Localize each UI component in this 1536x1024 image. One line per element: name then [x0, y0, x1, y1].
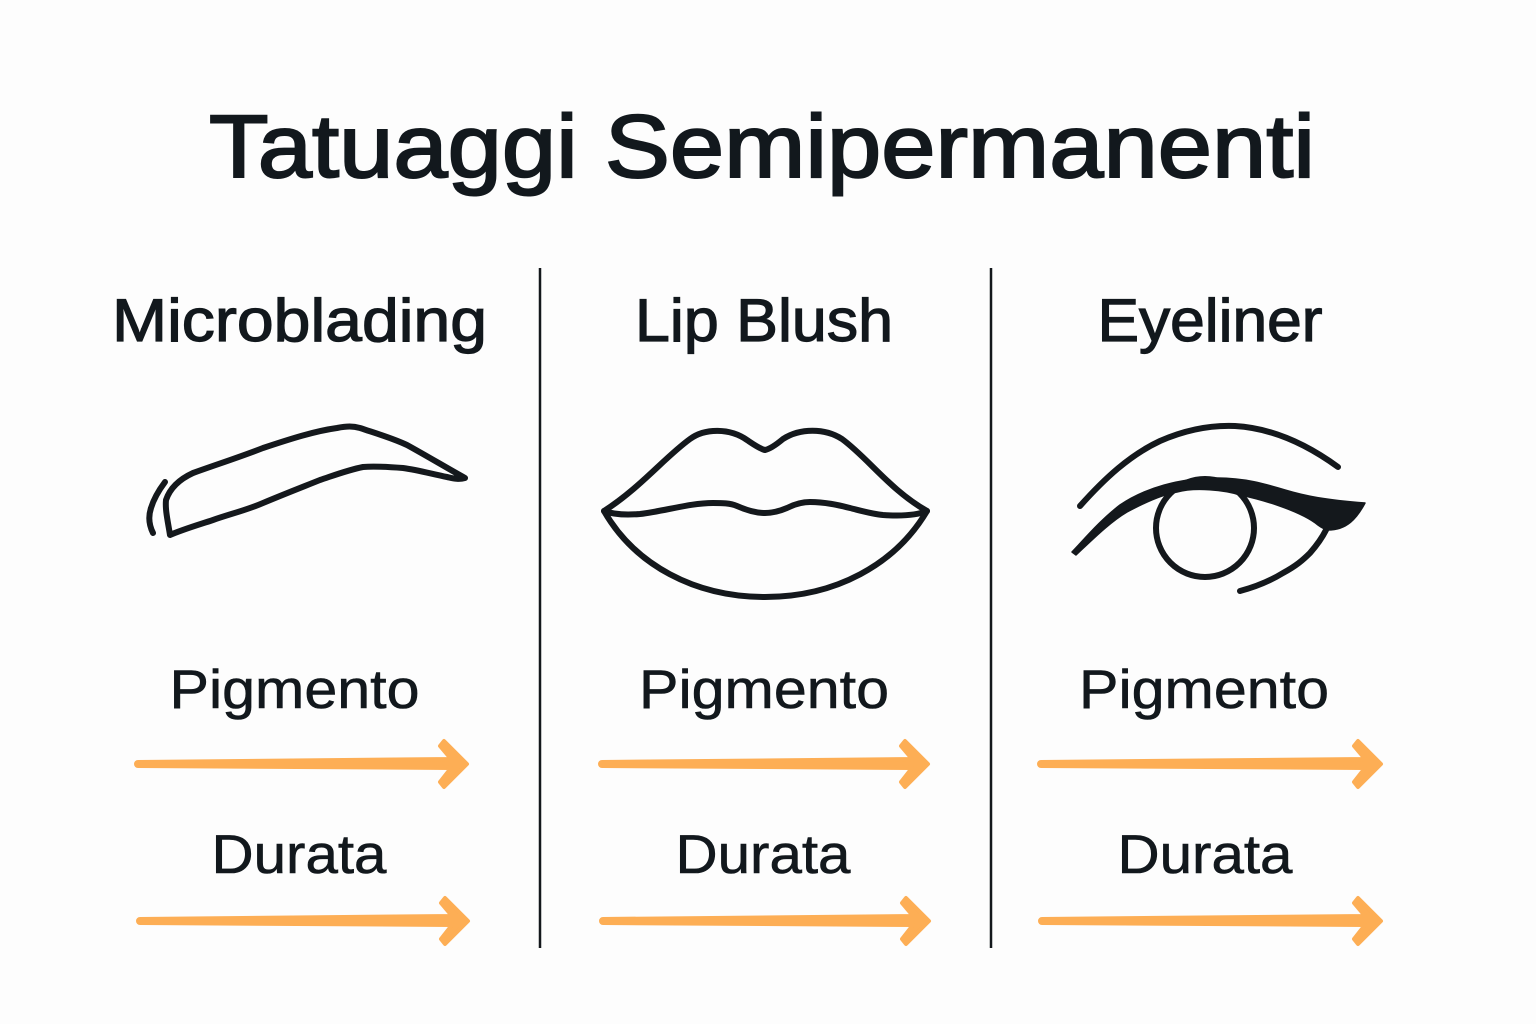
- arrow: Pigmento: [136, 741, 467, 787]
- arrow: Durata: [1040, 898, 1381, 944]
- icon: eyebrow: [149, 426, 465, 535]
- label: Pigmento: Pigmento: [1079, 658, 1329, 720]
- panel: Lip Blush: [600, 287, 929, 944]
- panel: Microblading: [112, 287, 487, 944]
- icon: lips: [604, 431, 927, 597]
- heading: Microblading: Microblading: [112, 287, 487, 354]
- arrow: Pigmento: [1039, 741, 1381, 787]
- label: Durata: Durata: [1118, 823, 1293, 885]
- divider left: [539, 268, 541, 948]
- title: Tatuaggi Semipermanenti: [209, 96, 1315, 196]
- arrow: Pigmento: [600, 741, 928, 787]
- divider right: [990, 268, 992, 948]
- panel: Eyeliner: [1039, 287, 1381, 944]
- label: Pigmento: Pigmento: [170, 658, 420, 720]
- label: Durata: Durata: [212, 823, 387, 885]
- icon: eye: [1072, 426, 1365, 591]
- arrow: Durata: [601, 898, 929, 944]
- label: Durata: Durata: [676, 823, 851, 885]
- icon: eyeliner wing: [1072, 478, 1365, 555]
- arrow: Durata: [138, 898, 468, 944]
- label: Pigmento: Pigmento: [639, 658, 889, 720]
- heading: Eyeliner: Eyeliner: [1098, 287, 1322, 354]
- heading: Lip Blush: Lip Blush: [635, 287, 893, 354]
